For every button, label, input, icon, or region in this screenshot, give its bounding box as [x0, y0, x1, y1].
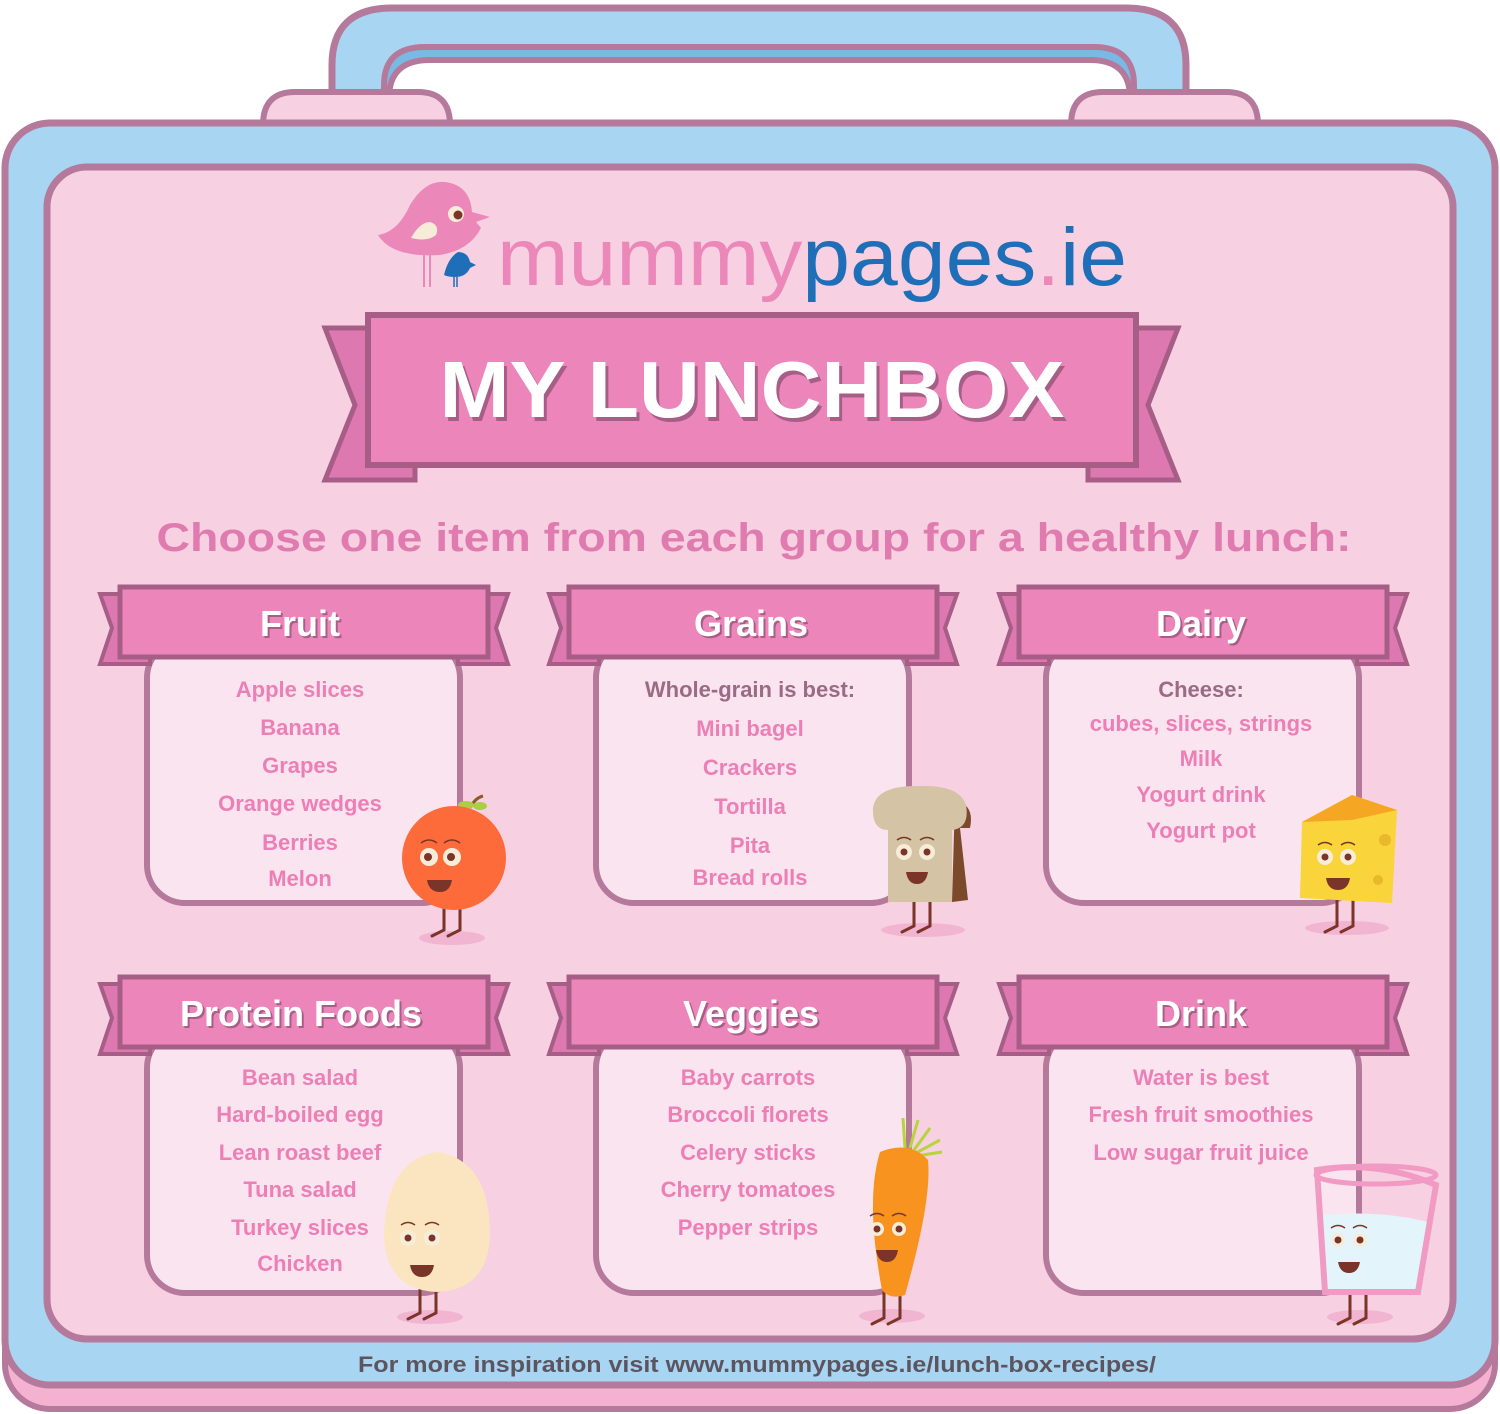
panel: Veggies: Celery sticks [680, 1140, 816, 1165]
panel: Protein Foods: Hard-boiled egg [216, 1102, 384, 1127]
icon: carrot character [859, 1118, 942, 1324]
logo: mummypages.ie [378, 182, 1127, 303]
panel: Grains: Crackers [703, 755, 797, 780]
panel: Grains: Grains [696, 605, 810, 646]
icon: glass of water character [1316, 1166, 1436, 1324]
panel: Veggies: Broccoli florets [667, 1102, 829, 1127]
panel: Grains: Pita [730, 833, 771, 858]
icon: orange character [402, 796, 506, 945]
panel: Fruit: Apple slices [236, 677, 364, 702]
subtitle: Choose one item from each group for a healthy lunch: [156, 516, 1352, 560]
panel: Dairy: Dairy [1158, 605, 1248, 646]
icon: cheese character [1300, 795, 1397, 935]
panel: Veggies: Pepper strips [678, 1215, 818, 1240]
panel: Protein Foods: Chicken [257, 1251, 343, 1276]
title banner: MY LUNCHBOX [442, 349, 1068, 438]
panel: Drink [999, 977, 1407, 1293]
panel: Protein Foods: Bean salad [242, 1065, 358, 1090]
panel: Veggies: Veggies [685, 995, 821, 1036]
panel: Protein Foods [100, 977, 508, 1293]
logo: mummypages.ie: mummypages.ie [497, 212, 1127, 303]
panel: Grains: Whole-grain is best: [645, 677, 855, 702]
panel: Drink: Fresh fruit smoothies [1089, 1102, 1313, 1127]
panel: Grains: Mini bagel [696, 716, 804, 741]
icon: birds [378, 182, 490, 287]
panel: Fruit: Fruit [262, 605, 342, 646]
title banner [325, 315, 1178, 480]
panel: Grains [549, 587, 957, 903]
panel: Fruit [100, 587, 508, 903]
panel: Grains: Bread rolls [693, 865, 807, 890]
footer text: For more inspiration visit www.mummypages.ie/lunch-box-recipes/ [358, 1352, 1156, 1377]
panel: Protein Foods: Lean roast beef [219, 1140, 382, 1165]
panel: Dairy [999, 587, 1407, 903]
panel: Dairy: Cheese: [1158, 677, 1244, 702]
panel: Drink: Low sugar fruit juice [1093, 1140, 1309, 1165]
title banner: MY LUNCHBOX [440, 345, 1064, 434]
icon: egg character [384, 1152, 490, 1324]
panel: Fruit: Banana [260, 715, 340, 740]
panel: Fruit: Melon [268, 866, 332, 891]
lunchbox handle [263, 8, 1258, 125]
panel: Drink: Drink [1157, 995, 1250, 1036]
panel: Drink: Drink [1155, 993, 1248, 1034]
panel: Fruit: Orange wedges [218, 791, 382, 816]
panel: Dairy: cubes, slices, strings [1090, 711, 1312, 736]
icon: bread character [873, 786, 971, 937]
panel: Protein Foods: Protein Foods [180, 993, 422, 1034]
panel: Dairy: Yogurt drink [1136, 782, 1266, 807]
panel: Veggies [549, 977, 957, 1293]
panel: Veggies: Veggies [683, 993, 819, 1034]
panel: Dairy: Yogurt pot [1146, 818, 1256, 843]
panel: Protein Foods: Turkey slices [231, 1215, 369, 1240]
panel: Grains: Grains [694, 603, 808, 644]
panel: Protein Foods: Protein Foods [182, 995, 424, 1036]
panel: Fruit: Berries [262, 830, 338, 855]
panel: Fruit: Grapes [262, 753, 338, 778]
panel: Fruit: Fruit [260, 603, 340, 644]
panel: Protein Foods: Tuna salad [243, 1177, 357, 1202]
panel: Grains: Tortilla [714, 794, 787, 819]
panel: Veggies: Cherry tomatoes [661, 1177, 835, 1202]
panel: Dairy: Dairy [1156, 603, 1246, 644]
panel: Drink: Water is best [1133, 1065, 1270, 1090]
panel: Dairy: Milk [1180, 746, 1223, 771]
panel: Veggies: Baby carrots [681, 1065, 815, 1090]
